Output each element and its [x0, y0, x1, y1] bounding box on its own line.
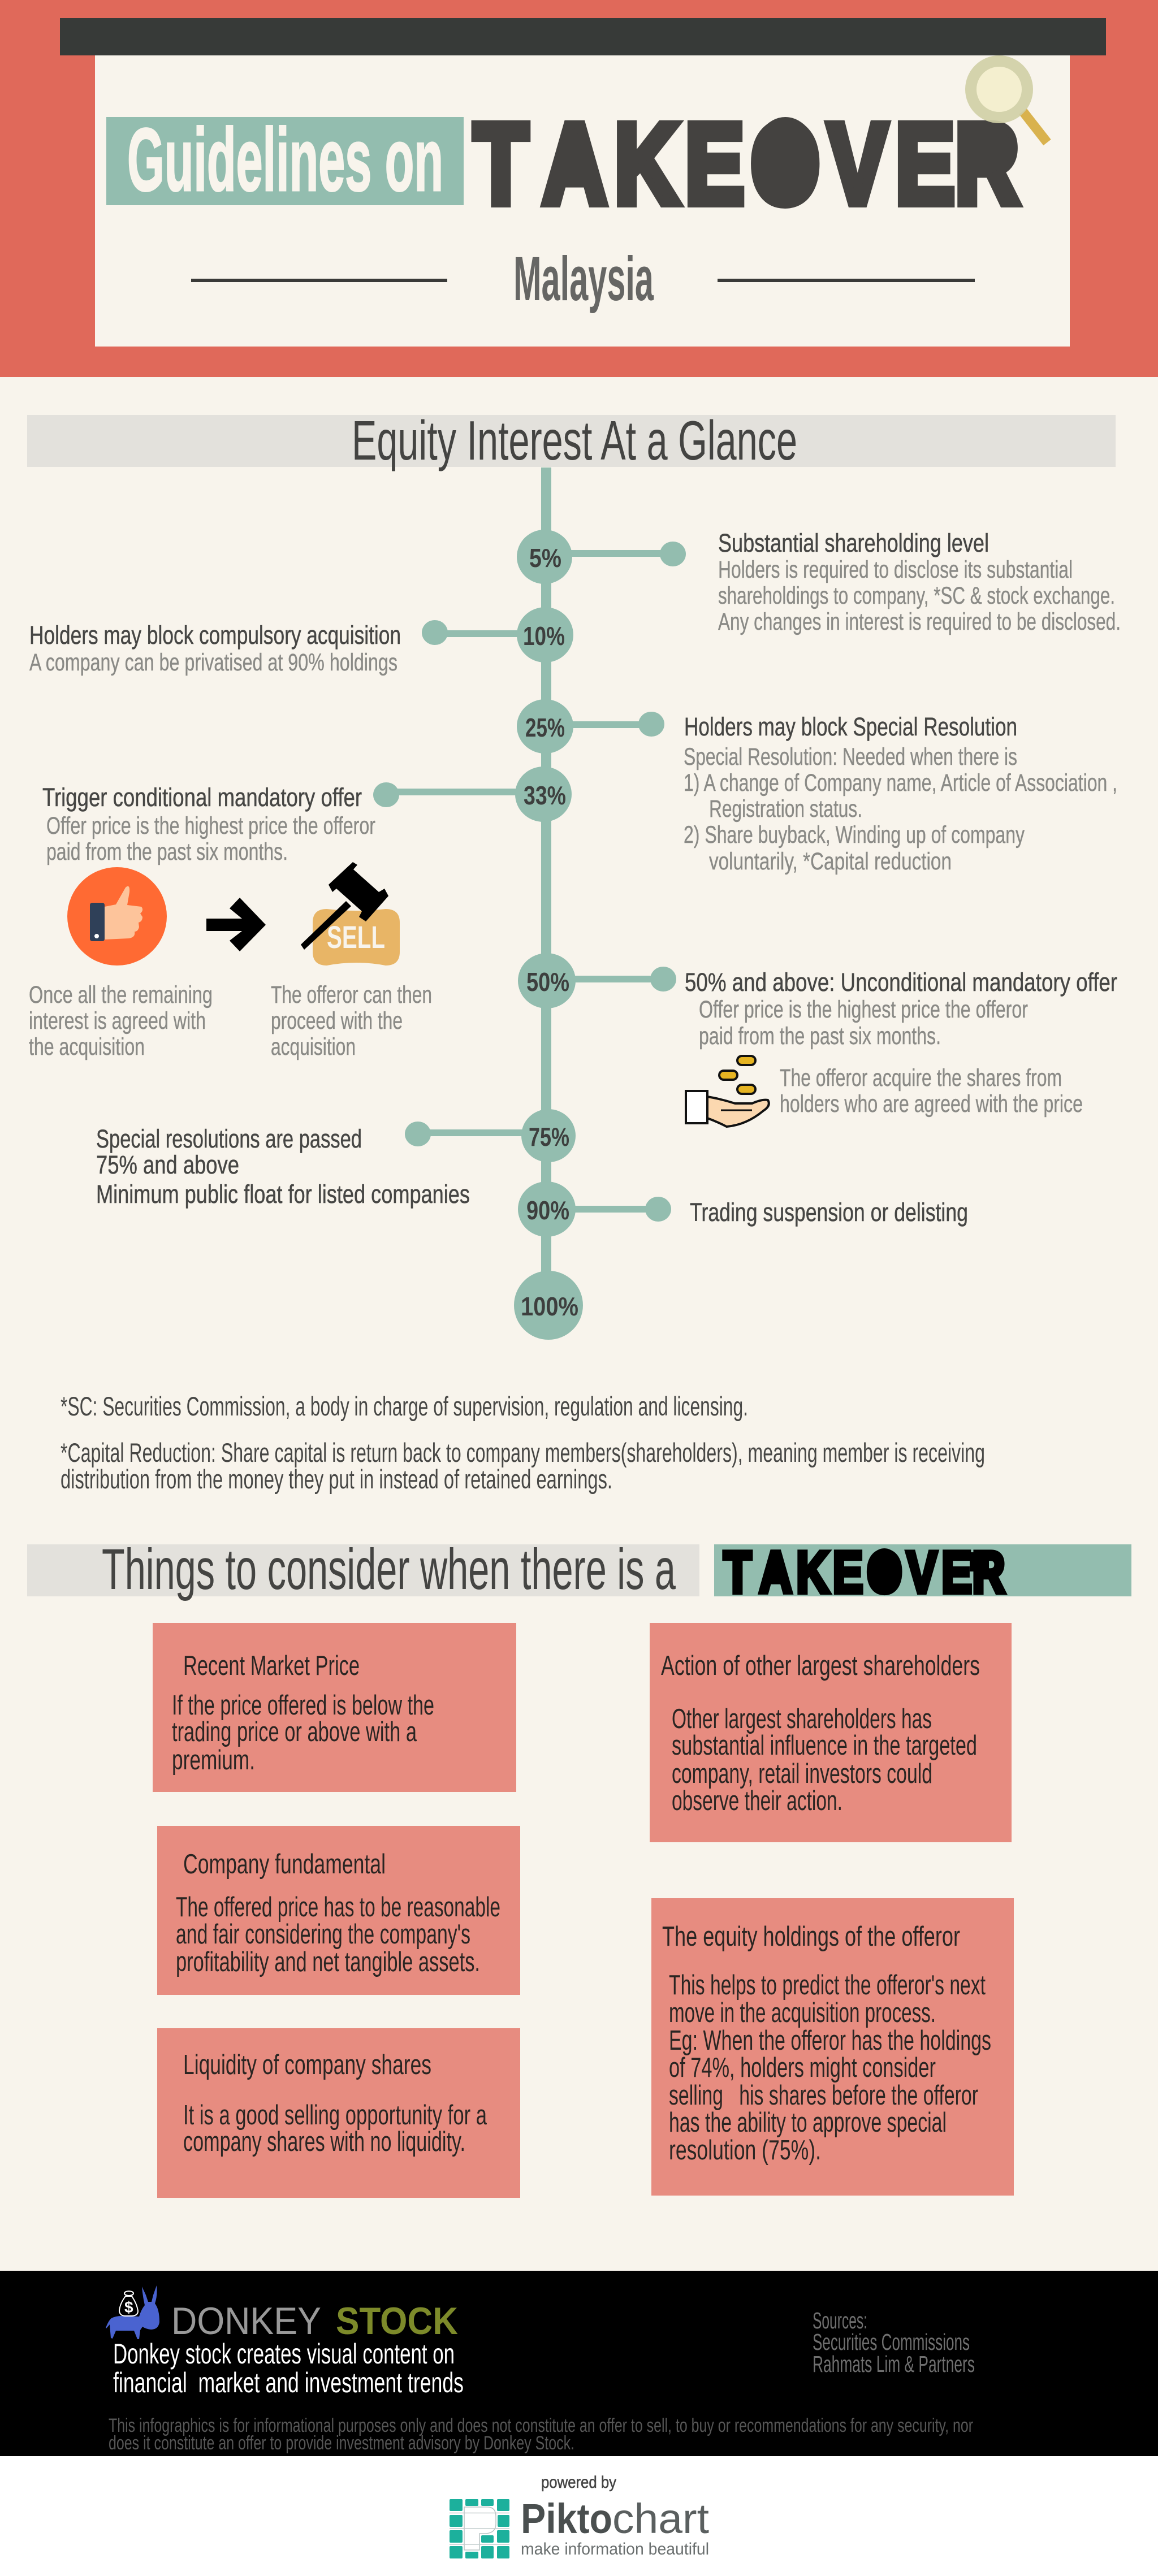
powered by: powered by — [541, 2473, 616, 2492]
wordmark: piktochart: Pikto — [521, 2495, 612, 2542]
section heading: equity interest — [27, 409, 1116, 471]
subtitle: Malaysia: Malaysia — [513, 244, 654, 314]
section heading: takeover label — [714, 1539, 1131, 1605]
text: proceed with acquisition — [271, 981, 432, 1060]
text: 33% conditional mandatory offer: paid from the past six months. — [46, 838, 288, 865]
card: recent market price: If the price offered is below the — [172, 1690, 434, 1721]
card: equity holdings of the offeror: resolution (75%). — [669, 2135, 821, 2166]
footer panel — [0, 2271, 1158, 2456]
text: remaining interest agreed: Once all the remaining — [29, 981, 213, 1008]
text: acquire shares — [780, 1064, 1083, 1118]
tagline: financial market and investment trends — [113, 2367, 464, 2399]
text: 50% unconditional mandatory offer: Offer price is the highest price the offeror — [699, 996, 1028, 1023]
sources: Rahmats Lim & Partners — [813, 2351, 975, 2377]
dark top bar — [60, 18, 1106, 55]
wordmark: piktochart: chart — [612, 2495, 709, 2542]
text: 25% block special resolution: voluntarily, *Capital reduction — [709, 848, 952, 875]
text: proceed with acquisition: acquisition — [271, 1033, 356, 1060]
section heading: things to consider: Things to consider when there is a — [102, 1537, 676, 1601]
percentage labels: 5% — [529, 543, 561, 573]
cream title panel — [95, 55, 1070, 347]
timeline spine — [541, 467, 551, 1281]
title: TAKEOVER: TAKEOVER — [474, 101, 1019, 227]
title: Guidelines on: Guidelines on — [127, 110, 443, 210]
text: acquire shares: The offeror acquire the shares from — [780, 1064, 1062, 1092]
text: 25% block special resolution — [684, 712, 1117, 875]
icon: magnifying glass — [965, 55, 1047, 142]
tagline: Donkey stock creates visual content on — [113, 2338, 455, 2370]
card: liquidity of company shares: Liquidity of company shares — [183, 2050, 431, 2080]
text: 75% special resolutions: Special resolutions are passed — [96, 1124, 362, 1153]
text: 75% special resolutions: 75% and above — [96, 1150, 239, 1179]
wordmark: piktochart — [521, 2495, 709, 2542]
percentage labels: 25% — [525, 713, 565, 742]
arrow: right — [206, 898, 266, 951]
percentage labels: 100% — [521, 1292, 578, 1321]
connector lines and dots — [373, 542, 686, 1222]
text: 50% unconditional mandatory offer: paid from the past six months. — [699, 1023, 941, 1050]
card: equity holdings of the offeror: The equity holdings of the offeror — [662, 1921, 960, 1952]
card: action of other largest shareholders — [650, 1623, 1012, 1842]
text: 90% trading suspension: Trading suspension or delisting — [690, 1198, 968, 1227]
logo: piktochart mark — [450, 2499, 509, 2558]
card: company fundamental: profitability and net tangible assets. — [176, 1947, 480, 1977]
card: action of other largest shareholders: Other largest shareholders has — [672, 1704, 932, 1734]
card: equity holdings of the offeror — [651, 1898, 1014, 2196]
percentage labels — [521, 543, 578, 1321]
card: recent market price: Recent Market Price — [183, 1651, 360, 1681]
text: 25% block special resolution: Registration status. — [709, 795, 862, 822]
text: proceed with acquisition: proceed with the — [271, 1007, 403, 1034]
sources: Securities Commissions — [813, 2329, 970, 2355]
logo: donkey — [106, 2285, 159, 2339]
text: 33% conditional mandatory offer — [42, 783, 375, 865]
card: equity holdings of the offeror: has the ability to approve special — [669, 2107, 947, 2138]
card: company fundamental: Company fundamental — [183, 1849, 386, 1880]
percentage labels: 10% — [523, 621, 565, 651]
footnotes — [61, 1391, 985, 1494]
text: 25% block special resolution: Holders may block Special Resolution — [684, 712, 1017, 741]
tagline — [113, 2338, 464, 2399]
percentage labels: 50% — [526, 967, 569, 997]
icon: gavel on sell sign: SELL — [327, 919, 385, 955]
card: recent market price: trading price or above with a — [172, 1717, 417, 1747]
card: liquidity of company shares — [157, 2028, 520, 2198]
card: liquidity of company shares: company shares with no liquidity. — [183, 2127, 465, 2157]
text: 75% special resolutions — [96, 1124, 470, 1209]
percentage labels: 75% — [529, 1122, 569, 1151]
card: company fundamental — [157, 1826, 520, 1995]
card: company fundamental: and fair considering the company's — [176, 1919, 470, 1950]
text: 33% conditional mandatory offer: Trigger conditional mandatory offer — [42, 783, 362, 812]
subtitle rule left — [191, 279, 447, 282]
logo text: stock: STOCK — [336, 2300, 458, 2343]
text: 10% block compulsory acquisition: Holders may block compulsory acquisition — [29, 621, 401, 650]
percentage labels: 33% — [524, 781, 566, 810]
tagline: make information beautiful: make information beautiful — [521, 2540, 709, 2558]
card: equity holdings of the offeror: move in the acquisition process. — [669, 1998, 936, 2028]
section heading: takeover label: TAKEOVER — [724, 1539, 1005, 1605]
card: equity holdings of the offeror: This helps to predict the offeror's next — [669, 1970, 986, 2001]
teal title label — [106, 117, 464, 205]
text: remaining interest agreed: interest is agreed with — [29, 1007, 206, 1034]
text: remaining interest agreed — [29, 981, 213, 1060]
logo: donkey: $ — [124, 2298, 133, 2316]
card: recent market price — [153, 1623, 516, 1792]
text: 10% block compulsory acquisition — [29, 621, 401, 676]
card: action of other largest shareholders: observe their action. — [672, 1786, 842, 1816]
disclaimer: does it constitute an offer to provide investment advisory by Donkey Stock. — [109, 2432, 574, 2454]
sources — [813, 2307, 975, 2377]
text: 10% block compulsory acquisition: A company can be privatised at 90% holdings — [29, 649, 397, 676]
percentage labels: 90% — [526, 1196, 569, 1225]
card: company fundamental: The offered price has to be reasonable — [176, 1892, 500, 1923]
logo text: donkey: DONKEY — [171, 2300, 321, 2343]
card: action of other largest shareholders: company, retail investors could — [672, 1759, 932, 1789]
card: action of other largest shareholders: substantial influence in the targeted — [672, 1730, 977, 1761]
text: 75% special resolutions: Minimum public float for listed companies — [96, 1180, 470, 1209]
disclaimer — [109, 2415, 973, 2454]
icon: hand with coins — [686, 1056, 769, 1127]
card: equity holdings of the offeror: selling his shares before the offeror — [669, 2080, 978, 2111]
percentage nodes — [514, 530, 583, 1340]
icon: gavel on sell sign — [301, 862, 400, 966]
text: remaining interest agreed: the acquisition — [29, 1033, 145, 1060]
footnotes: *SC: Securities Commission, a body in charge of supervision, regulation and licensing. — [61, 1391, 748, 1421]
piktochart footer area — [0, 2456, 1158, 2576]
text: 50% unconditional mandatory offer — [685, 968, 1117, 1050]
card: equity holdings of the offeror: Eg: When the offeror has the holdings — [669, 2025, 991, 2056]
section heading: things to consider — [27, 1537, 699, 1601]
subtitle rule right — [718, 279, 975, 282]
card: recent market price: premium. — [172, 1745, 255, 1776]
card: equity holdings of the offeror: of 74%, holders might consider — [669, 2053, 936, 2083]
text: proceed with acquisition: The offeror can then — [271, 981, 432, 1008]
footnotes: distribution from the money they put in instead of retained earnings. — [61, 1464, 612, 1494]
text: 25% block special resolution: 2) Share buyback, Winding up of company — [684, 821, 1025, 848]
header banner — [0, 0, 1158, 377]
timeline chart — [373, 467, 686, 1340]
sources: Sources: — [813, 2307, 867, 2333]
card: action of other largest shareholders: Action of other largest shareholders — [661, 1651, 980, 1681]
card: liquidity of company shares: It is a good selling opportunity for a — [183, 2100, 487, 2131]
text: 5% substantial shareholding — [718, 529, 1121, 635]
text: 5% substantial shareholding: Substantial shareholding level — [718, 529, 989, 557]
section heading: equity interest: Equity Interest At a Glance — [352, 409, 797, 471]
icon: thumbs up — [67, 867, 167, 966]
text: 25% block special resolution: Special Resolution: Needed when there is — [684, 743, 1017, 770]
text: 33% conditional mandatory offer: Offer price is the highest price the offeror — [46, 812, 375, 839]
